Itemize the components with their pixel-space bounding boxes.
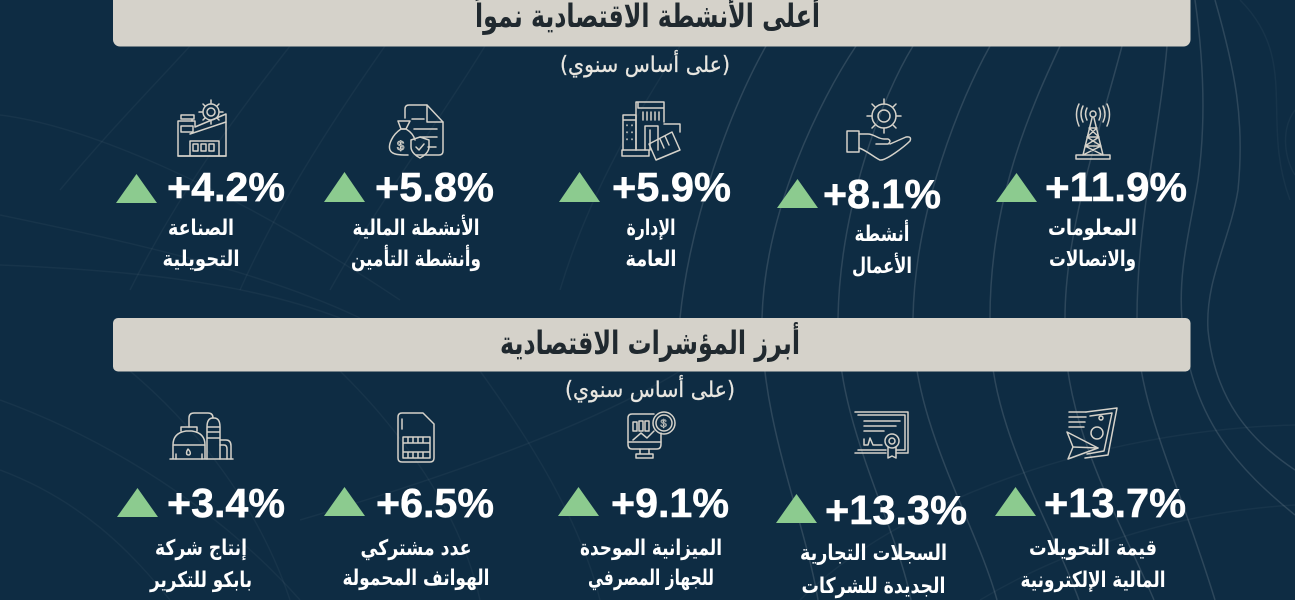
up triangle [558,487,599,516]
icon: money transfer [1067,408,1117,459]
label: الصناعة [168,216,234,241]
label: الأعمال [852,251,912,279]
label: المالية الإلكترونية [1020,568,1166,593]
value: +9.1% [611,480,729,526]
label: عدد مشتركي [360,536,472,561]
item: mobile subscribers [324,413,494,591]
value: +6.5% [376,480,494,526]
title: main indicators: أبرز المؤشرات الاقتصادية [500,322,800,362]
label: للجهاز المصرفي [588,566,714,591]
label [162,216,240,272]
up triangle [324,172,365,202]
label: السجلات التجارية [800,541,947,566]
header bar: main economic indicators [113,318,1190,372]
label: وأنشطة التأمين [351,244,481,272]
icon: government building with book [622,102,680,160]
label: المعلومات [1048,216,1137,241]
icon: antenna tower [1076,104,1110,159]
icon: factory with gear [178,100,226,156]
label [580,536,722,591]
item: financial and insurance activities [324,105,494,272]
value: +5.9% [612,164,731,210]
label: إنتاج شركة [155,536,247,561]
label [351,213,481,272]
item: electronic financial transfers [995,408,1186,593]
subtitle: annual basis: (على أساس سنوي) [565,375,735,403]
icon: document and money bag [389,105,443,158]
icon: refinery [170,413,233,459]
label [149,536,252,593]
label: الجديدة للشركات [802,574,946,599]
icon: document and money bag: $ [397,138,405,153]
label: الهواتف المحمولة [342,566,490,591]
label [626,216,676,272]
label [852,219,912,279]
label [1020,536,1166,593]
item: public administration [559,102,731,272]
item: consolidated banking budget [558,412,729,591]
value: +13.3% [825,487,967,533]
label: والاتصالات [1049,247,1136,272]
label [1048,216,1137,272]
subtitle: annual basis: (على أساس سنوي) [560,50,730,78]
label: قيمة التحويلات [1029,536,1157,561]
icon: hand holding gear [847,99,910,160]
up triangle [116,174,157,203]
icon: monitor with chart and dollar: $ [660,418,667,430]
label: الأنشطة المالية [352,213,480,241]
header bar: top growth activities [113,0,1190,46]
icon: certificate [855,412,908,458]
label: التحويلية [162,247,240,272]
icon: monitor with chart and dollar [628,412,675,458]
item: BAPCO refining output [117,413,285,593]
icon: SIM card [398,413,434,462]
value: +8.1% [823,171,941,217]
item: manufacturing [116,100,285,272]
value: +5.8% [375,164,494,210]
up triangle [117,488,158,517]
label: أنشطة [854,219,910,247]
up triangle [324,487,365,516]
item: business activities [777,99,941,279]
up triangle [777,179,818,208]
label: بابكو للتكرير [149,568,252,593]
up triangle [776,494,817,523]
value: +4.2% [167,164,285,210]
label: العامة [626,247,676,272]
value: +13.7% [1044,480,1186,526]
item: information and communications [996,104,1187,272]
label [800,541,947,599]
item: new commercial registrations [776,412,967,599]
value: +3.4% [167,480,285,526]
label [342,536,490,591]
up triangle [559,172,600,202]
value: +11.9% [1045,164,1187,210]
label: الإدارة [626,216,676,241]
up triangle [996,173,1037,202]
up triangle [995,487,1036,516]
label: الميزانية الموحدة [580,536,722,561]
